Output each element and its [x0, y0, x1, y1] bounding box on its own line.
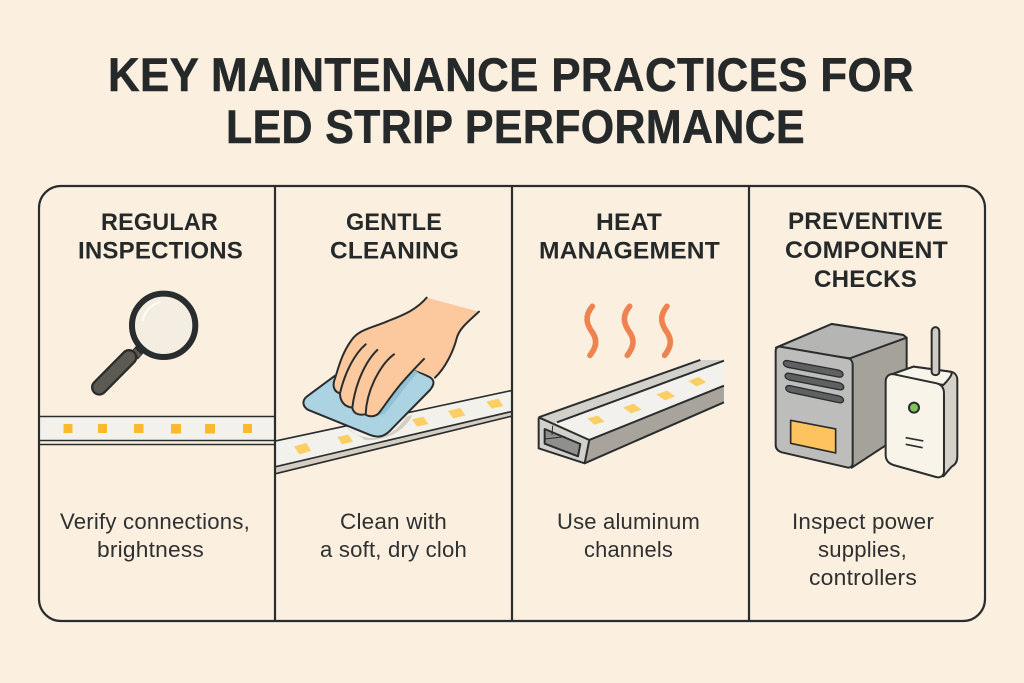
text: inspect power supplies: supplies,: [818, 537, 907, 562]
title: KEY MAINTENANCE PRACTICES FOR: [108, 48, 914, 101]
icon: heat waves: [587, 306, 670, 355]
heading: regular inspections: INSPECTIONS: [78, 238, 243, 264]
text: clean with cloth: [320, 509, 467, 562]
panel: heat management: [539, 209, 724, 562]
text: inspect power supplies: [792, 509, 934, 590]
heading: heat management: [539, 209, 720, 264]
text: clean with cloth: Clean with: [340, 509, 447, 534]
heading: heat management: HEAT: [596, 209, 662, 236]
text: verify connections: [60, 509, 250, 562]
heading: heat management: MANAGEMENT: [539, 238, 720, 264]
text: use aluminum channels: Use aluminum: [557, 509, 700, 534]
title: LED STRIP PERFORMANCE: [226, 100, 805, 153]
icon: power supply box: [776, 324, 907, 468]
text: clean with cloth: a soft, dry cloh: [320, 537, 467, 562]
heading: preventive component checks: [785, 208, 948, 293]
panel: gentle cleaning: [276, 209, 511, 562]
heading: preventive component checks: PREVENTIVE: [788, 208, 943, 235]
icon: aluminum channel with LEDs: [539, 360, 724, 463]
heading: regular inspections: [78, 209, 243, 264]
heading: preventive component checks: CHECKS: [814, 266, 917, 293]
icon: controller with antenna: [886, 327, 957, 477]
heading: regular inspections: REGULAR: [101, 209, 218, 236]
panel: regular inspections: [39, 209, 275, 562]
title: [108, 48, 914, 153]
icon: LED strip, straight: [39, 416, 275, 444]
heading: gentle cleaning: [330, 209, 459, 264]
panel frame: [39, 186, 985, 621]
text: verify connections: brightness: [97, 537, 204, 562]
text: inspect power supplies: controllers: [809, 565, 917, 590]
heading: gentle cleaning: GENTLE: [346, 209, 442, 236]
text: verify connections: Verify connections,: [60, 509, 250, 534]
icon: LED strip, angled: [276, 391, 511, 474]
text: use aluminum channels: [557, 509, 700, 562]
panel: preventive component checks: [776, 208, 957, 590]
icon: hand wiping with cloth: [303, 298, 479, 440]
text: use aluminum channels: channels: [584, 537, 673, 562]
heading: preventive component checks: COMPONENT: [785, 237, 948, 264]
text: inspect power supplies: Inspect power: [792, 509, 934, 534]
icon: magnifying glass: [99, 294, 195, 387]
heading: gentle cleaning: CLEANING: [330, 238, 459, 264]
